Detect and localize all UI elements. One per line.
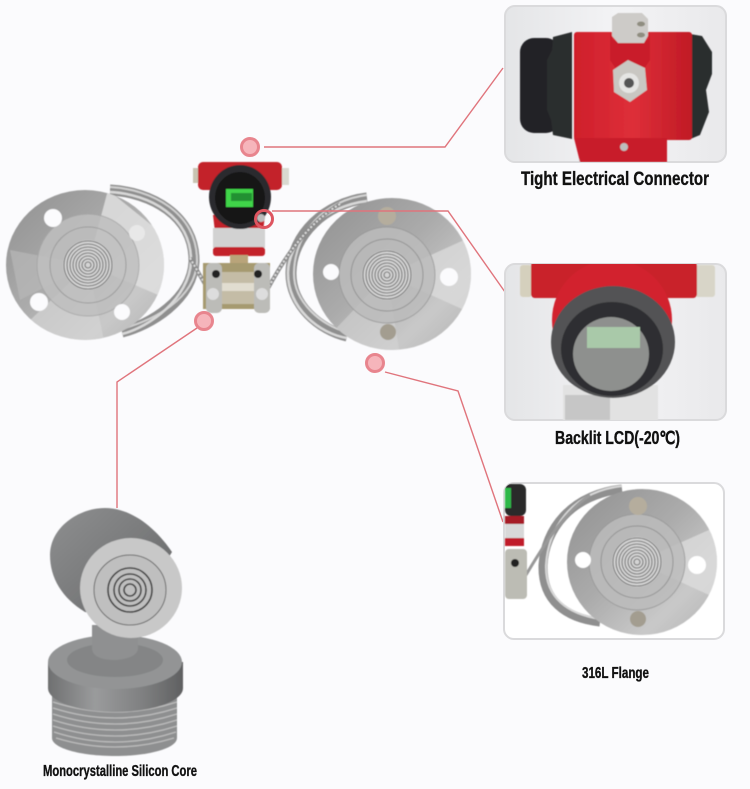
panel: backlit LCD [505, 260, 726, 421]
panel: 316L flange [504, 483, 724, 639]
leader line: silicon core [117, 328, 197, 508]
marker: silicon core [196, 312, 212, 330]
valve block [203, 263, 270, 309]
marker: electrical connector [242, 138, 258, 156]
capsule body [50, 508, 172, 620]
display head with LCD [209, 165, 271, 229]
right flange [313, 198, 475, 355]
leader line: backlit LCD [272, 211, 505, 292]
label: monocrystalline silicon core: Monocrystalline Silicon Core [43, 763, 197, 780]
transmitter body [193, 162, 289, 313]
main product: transmitter with remote flanges [6, 162, 475, 355]
label: backlit LCD: Backlit LCD(-20℃) [555, 428, 680, 448]
illustration: monocrystalline silicon core [48, 508, 183, 756]
neck [92, 625, 138, 660]
threaded base [52, 695, 177, 756]
marker: backlit LCD [256, 210, 272, 228]
marker: 316L flange [366, 354, 384, 372]
capsule face with diaphragm rings [80, 538, 182, 638]
panel: tight electrical connector [505, 6, 726, 162]
left capillary cable [110, 187, 213, 334]
leader line: 316L flange [385, 372, 503, 522]
right capillary cable [266, 195, 367, 338]
base disk [48, 635, 183, 712]
left flange [6, 190, 170, 345]
label: 316L flange: 316L Flange [582, 665, 649, 682]
leader line: electrical connector [264, 68, 503, 147]
